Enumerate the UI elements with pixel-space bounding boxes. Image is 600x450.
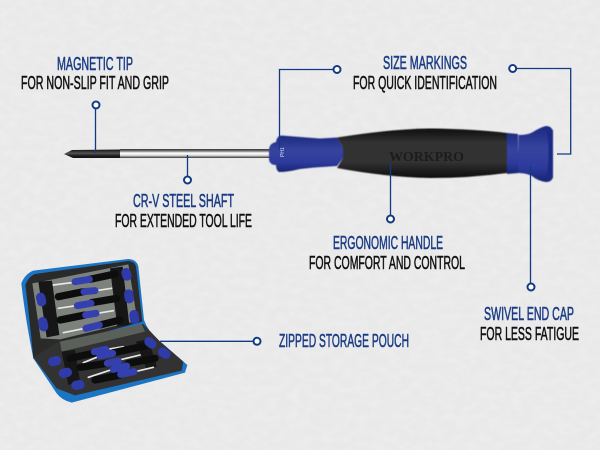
drivers <box>41 273 166 385</box>
swivel end cap <box>518 126 553 182</box>
magnetic tip <box>64 150 120 158</box>
brand mark: WORKPRO <box>389 150 464 165</box>
callout: steel shaft <box>115 155 252 231</box>
steel shaft <box>120 149 270 158</box>
callout: steel shaft: FOR EXTENDED TOOL LIFE <box>115 211 252 231</box>
callout: size markings: SIZE MARKINGS <box>383 53 467 73</box>
elastic straps <box>38 267 129 337</box>
dark zipper rim upper <box>25 261 142 358</box>
callout: magnetic tip <box>21 54 169 153</box>
callout: storage pouch <box>160 331 409 351</box>
callout: size markings <box>280 53 571 154</box>
black ergonomic grip <box>337 128 507 178</box>
callout: magnetic tip: FOR NON-SLIP FIT AND GRIP <box>21 73 169 93</box>
grey divider <box>60 324 145 352</box>
size marking: PH1 <box>280 147 286 157</box>
callout: magnetic tip: MAGNETIC TIP <box>57 54 133 74</box>
blue outer case <box>21 259 187 403</box>
screwdriver <box>64 126 553 182</box>
handle <box>269 126 553 182</box>
lower flap <box>33 324 183 395</box>
callout: ergonomic handle: ERGONOMIC HANDLE <box>333 233 443 253</box>
blue collar <box>507 133 519 174</box>
callout: steel shaft: CR-V STEEL SHAFT <box>133 191 234 211</box>
callout: swivel end cap <box>480 166 579 344</box>
callout: ergonomic handle <box>309 164 465 273</box>
grey upper lining <box>32 264 137 339</box>
callout: storage pouch: ZIPPED STORAGE POUCH <box>279 331 409 351</box>
pouch <box>21 259 187 403</box>
callout: size markings: FOR QUICK IDENTIFICATION <box>353 73 497 93</box>
blue neck of handle <box>269 136 343 172</box>
callout: ergonomic handle: FOR COMFORT AND CONTROL <box>309 253 465 273</box>
